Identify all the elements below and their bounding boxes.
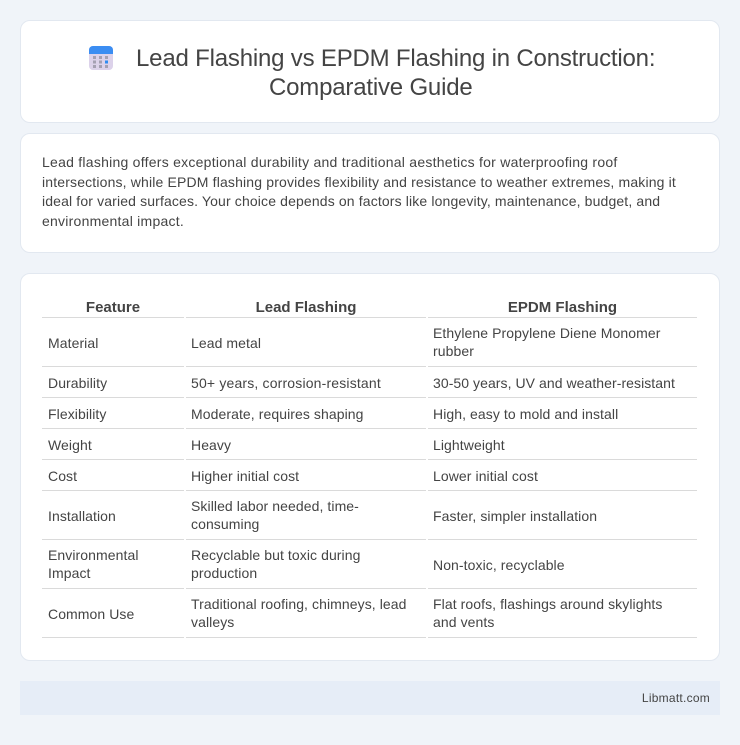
row: cost: Cost <box>48 468 77 484</box>
row: flexibility: Flexibility <box>48 406 106 422</box>
row: material: Material <box>48 335 98 351</box>
row: flexibility: High, easy to mold and install <box>433 406 618 422</box>
intro text panel <box>20 133 720 253</box>
row: environmental impact <box>42 547 697 589</box>
row: cost <box>42 468 697 491</box>
row: installation <box>42 498 697 540</box>
row: flexibility <box>42 406 697 429</box>
title <box>136 45 655 101</box>
table header row: Lead Flashing <box>256 299 356 316</box>
row: durability: Durability <box>48 375 107 391</box>
intro paragraph: Lead flashing offers exceptional durability and traditional aesthetics for waterproofing roof <box>42 154 618 170</box>
row: common use: Common Use <box>48 606 134 622</box>
row: cost: Lower initial cost <box>433 468 538 484</box>
intro paragraph: environmental impact. <box>42 213 184 229</box>
row: common use: valleys <box>191 614 234 630</box>
row: installation: Faster, simpler installation <box>433 508 597 524</box>
row: installation: Installation <box>48 508 116 524</box>
row: common use: Traditional roofing, chimneys, lead <box>191 596 406 612</box>
row: environmental impact: Recyclable but toxic during <box>191 547 360 563</box>
intro paragraph: ideal for varied surfaces. Your choice depends on factors like longevity, maintenance, budget, and <box>42 193 660 209</box>
row: environmental impact: Impact <box>48 565 90 581</box>
row: common use <box>42 596 697 638</box>
intro paragraph <box>42 154 676 229</box>
footer attribution: Libmatt.com <box>642 691 710 705</box>
row: environmental impact: Non-toxic, recyclable <box>433 557 565 573</box>
row: durability: 30-50 years, UV and weather-resistant <box>433 375 675 391</box>
row: material: Ethylene Propylene Diene Monomer <box>433 325 660 341</box>
row: weight <box>42 437 697 460</box>
row: material <box>42 325 697 367</box>
row: weight: Lightweight <box>433 437 505 453</box>
row: common use: and vents <box>433 614 494 630</box>
intro paragraph: intersections, while EPDM flashing provides flexibility and resistance to weather extremes, making it <box>42 174 676 190</box>
icon: calendar <box>89 46 113 70</box>
row: installation: Skilled labor needed, time- <box>191 498 359 514</box>
footer <box>20 681 720 715</box>
title: Comparative Guide <box>269 74 473 101</box>
row: weight: Heavy <box>191 437 231 453</box>
row: cost: Higher initial cost <box>191 468 299 484</box>
row: environmental impact: production <box>191 565 257 581</box>
table header row: EPDM Flashing <box>508 299 617 316</box>
row: common use: Flat roofs, flashings around skylights <box>433 596 662 612</box>
row: flexibility: Moderate, requires shaping <box>191 406 364 422</box>
row: environmental impact: Environmental <box>48 547 139 563</box>
table header row <box>42 299 697 318</box>
comparison table panel <box>20 273 720 661</box>
row: material: Lead metal <box>191 335 261 351</box>
row: durability <box>42 375 697 398</box>
comparison table <box>42 299 697 638</box>
row: durability: 50+ years, corrosion-resistant <box>191 375 381 391</box>
title: Lead Flashing vs EPDM Flashing in Construction: <box>136 45 655 72</box>
row: installation: consuming <box>191 516 259 532</box>
header card <box>20 20 720 123</box>
row: weight: Weight <box>48 437 92 453</box>
row: material: rubber <box>433 343 474 359</box>
table header row: Feature <box>86 299 140 316</box>
